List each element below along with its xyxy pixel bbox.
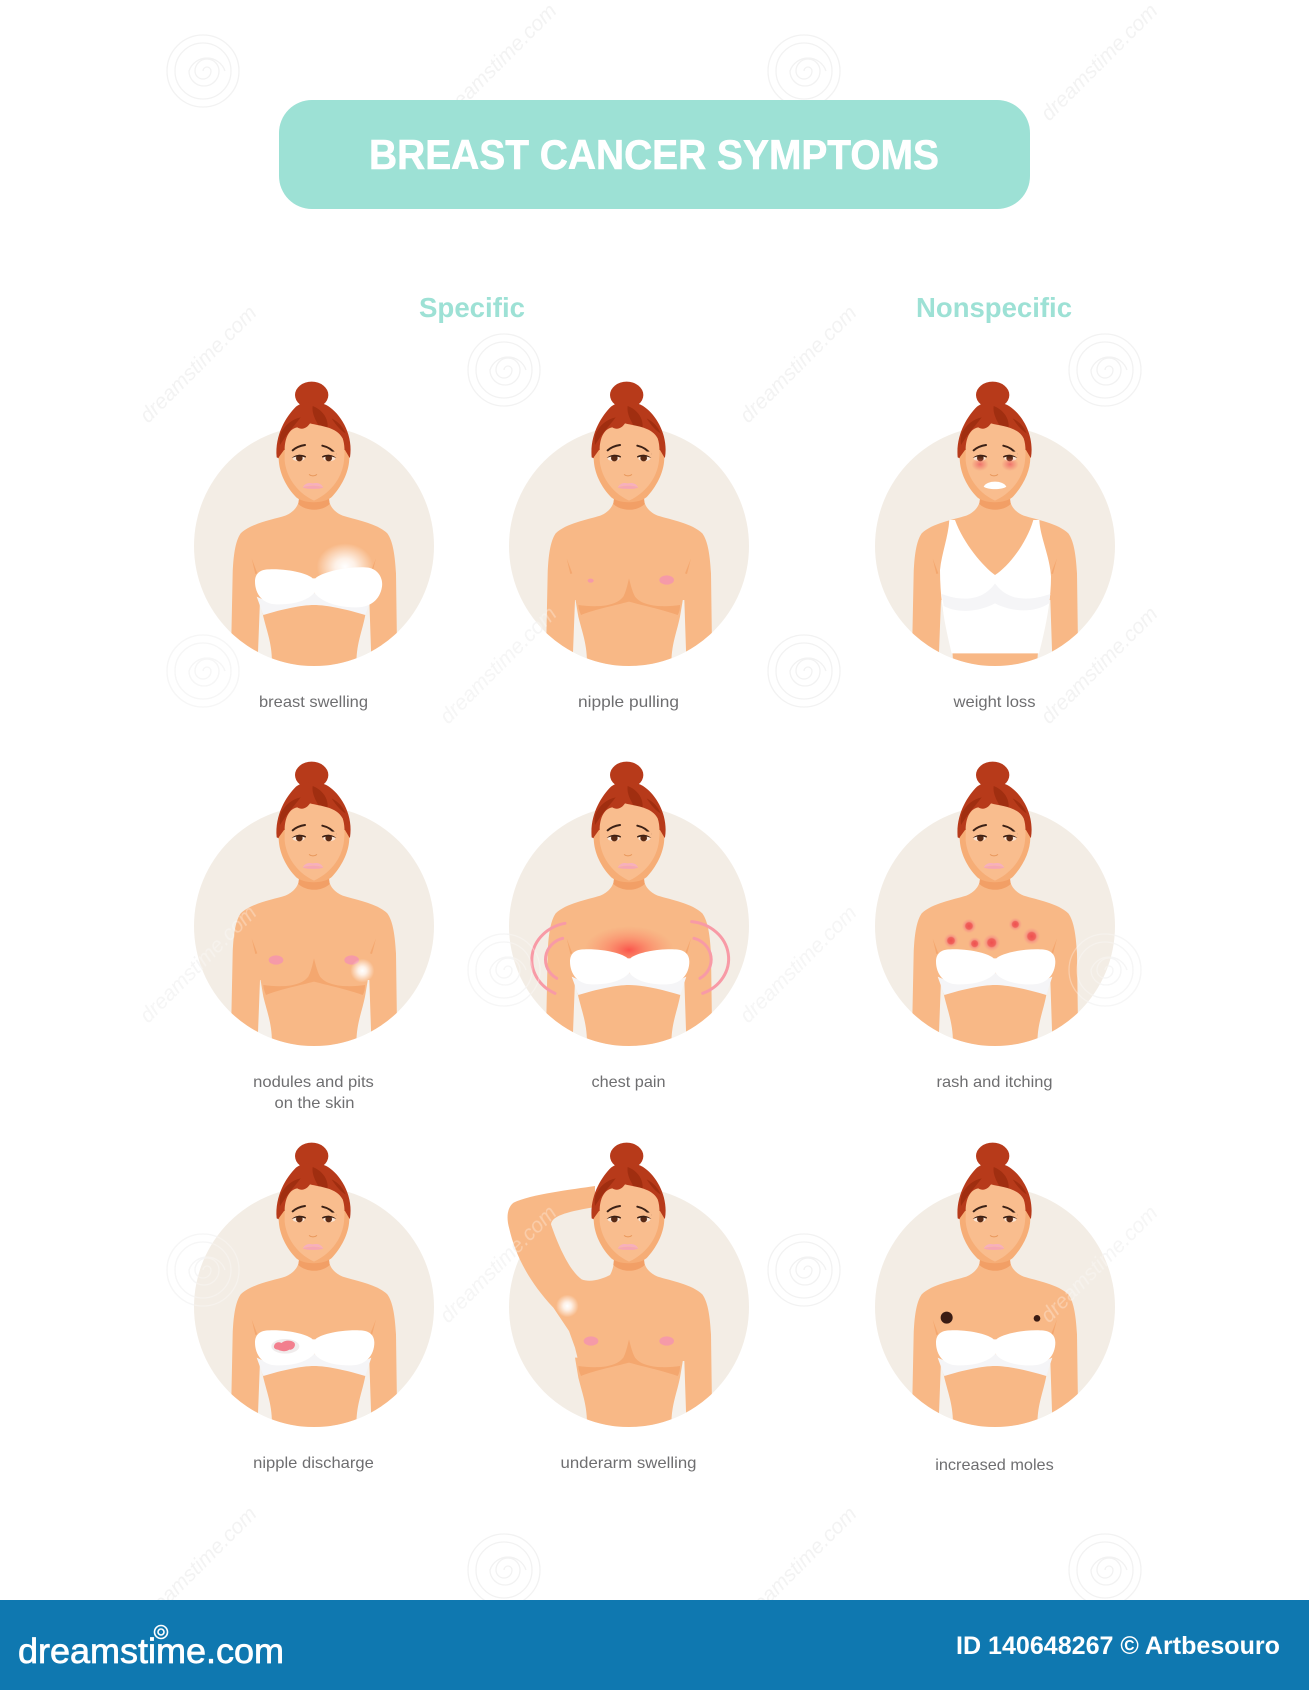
title: BREAST CANCER SYMPTOMS <box>369 131 939 178</box>
panel: nipple pulling <box>509 382 749 711</box>
watermark background: dreamstime.com <box>1036 1201 1162 1327</box>
watermark background: dreamstime.com <box>435 602 561 728</box>
panel: rash and itching <box>875 762 1115 1091</box>
figure: chest pain <box>532 762 729 1050</box>
heading: nonspecific: Nonspecific <box>916 292 1072 323</box>
watermark background: dreamstime.com <box>735 301 861 427</box>
figure: nipple pulling <box>546 382 712 670</box>
heading: specific: Specific <box>419 292 525 323</box>
panel: weight loss <box>875 382 1115 711</box>
figure: nodules and pits <box>231 762 397 1050</box>
figure: breast swelling <box>231 382 397 670</box>
watermark background: dreamstime.com <box>1036 0 1162 125</box>
footer logo: dreamstime.com <box>18 1632 284 1671</box>
watermark overlay: dreamstime.com <box>1036 1201 1162 1327</box>
watermark overlay: dreamstime.com <box>435 602 561 728</box>
figure: nipple discharge <box>231 1143 397 1431</box>
label: breast swelling <box>259 694 368 711</box>
panel: nipple discharge <box>194 1143 434 1472</box>
watermark background: dreamstime.com <box>735 1502 861 1628</box>
label: rash and itching <box>936 1074 1052 1091</box>
footer credit: ID 140648267 © Artbesouro <box>956 1632 1280 1660</box>
panel: nodules and pits on the skin <box>194 762 434 1112</box>
watermark background: dreamstime.com <box>435 1201 561 1327</box>
panel: breast swelling <box>194 382 434 711</box>
label: nipple discharge <box>253 1455 374 1472</box>
label: weight loss <box>952 694 1036 711</box>
icon: logo spiral <box>154 1626 168 1638</box>
watermark background: dreamstime.com <box>135 301 261 427</box>
panel: increased moles <box>875 1143 1115 1474</box>
watermark background: dreamstime.com <box>1036 602 1162 728</box>
watermark background: dreamstime.com <box>435 0 561 125</box>
figure: underarm swelling <box>508 1143 712 1431</box>
figure: rash and itching <box>912 762 1078 1050</box>
watermark overlay: dreamstime.com <box>735 901 861 1027</box>
panel: underarm swelling <box>508 1143 749 1472</box>
title banner <box>279 100 1030 209</box>
icon: pain arcs <box>532 922 729 993</box>
footer bar <box>0 1600 1309 1690</box>
watermark overlay: dreamstime.com <box>435 1201 561 1327</box>
label: increased moles <box>935 1457 1054 1474</box>
label: chest pain <box>592 1074 666 1091</box>
panel: chest pain <box>509 762 749 1091</box>
label: nipple pulling <box>578 694 679 711</box>
watermark overlay: dreamstime.com <box>135 901 261 1027</box>
label: nodules and pits <box>253 1074 374 1091</box>
watermark background: dreamstime.com <box>135 901 261 1027</box>
label line 2: on the skin <box>274 1095 354 1112</box>
watermark background <box>135 0 1162 1628</box>
watermark background: dreamstime.com <box>735 901 861 1027</box>
watermark overlay <box>135 602 1162 1327</box>
label: underarm swelling <box>560 1455 696 1472</box>
figure: increased moles <box>912 1143 1078 1431</box>
figure: weight loss <box>912 382 1078 670</box>
watermark background: dreamstime.com <box>135 1502 261 1628</box>
